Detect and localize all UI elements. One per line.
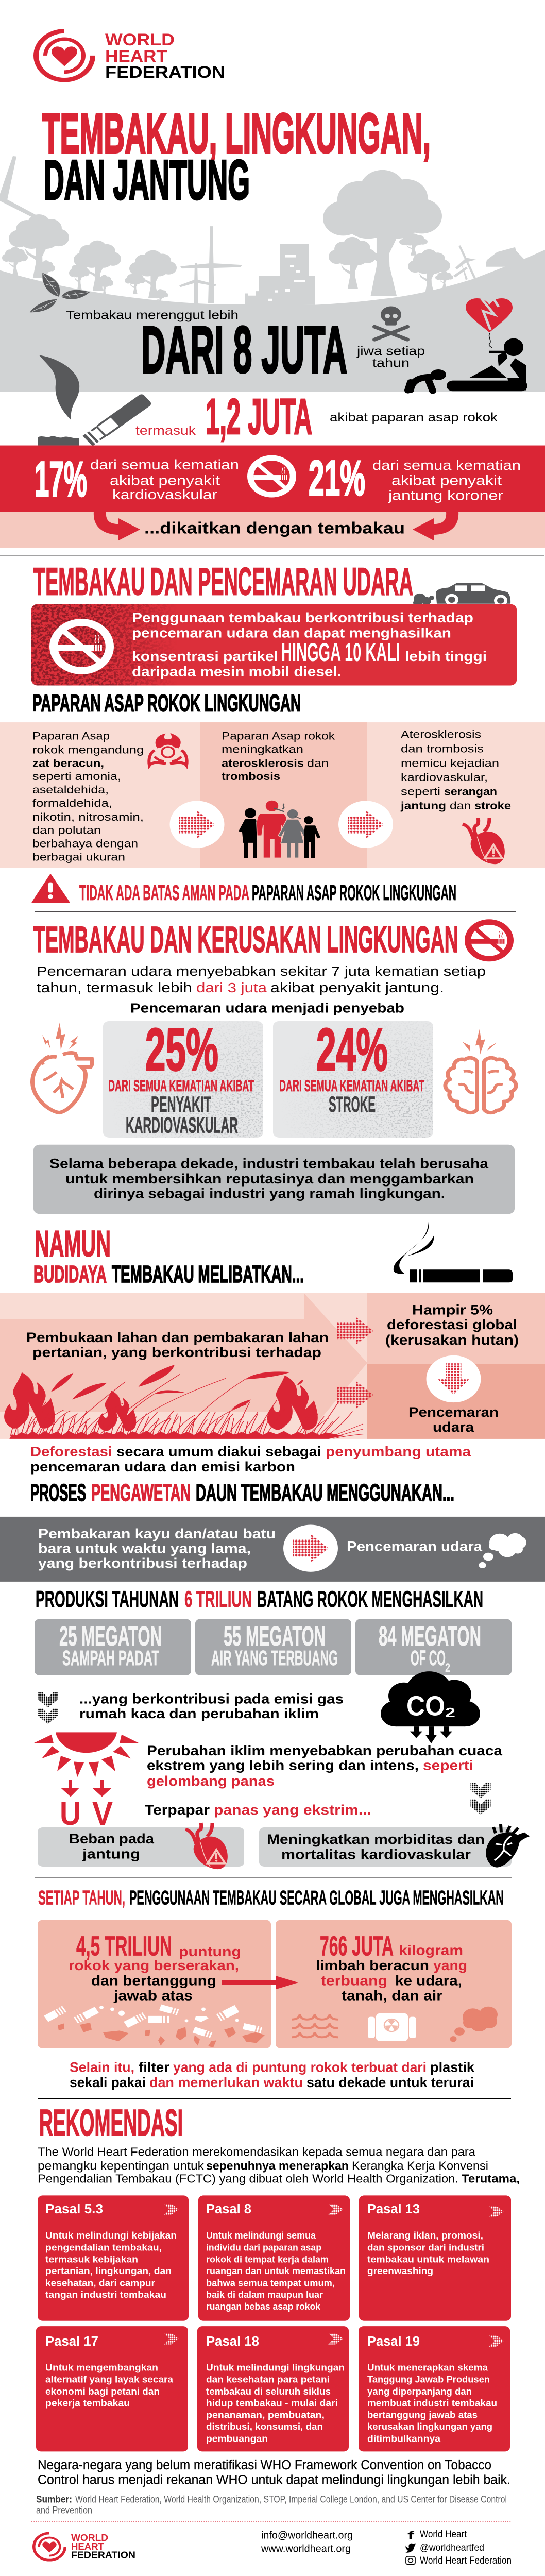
card: Pasal 8: bahwa semua tempat umum,	[206, 2278, 335, 2289]
icon: double dotted chevron right	[471, 1783, 490, 1815]
stat: 21%: jantung koroner	[388, 488, 503, 503]
social links	[405, 2529, 512, 2566]
callout text: Penggunaan tembakau berkontribusi terhadap	[132, 611, 473, 625]
subheading: pencemaran udara menjadi penyebab: Pencemaran udara menjadi penyebab	[130, 1001, 404, 1015]
stat: 17%	[35, 451, 239, 507]
card: Pasal 19: kerusakan lingkungan yang	[367, 2421, 492, 2432]
panel: 766 juta toxic waste: kilogram	[399, 1943, 463, 1958]
card: Pasal 8: ruangan dan untuk memastikan	[206, 2266, 346, 2277]
logo: footer	[34, 2533, 135, 2561]
warning: no safe level: TIDAK ADA BATAS AMAN PADA	[79, 881, 249, 905]
stat box: 25 megaton	[35, 1619, 191, 1675]
logo wordmark: HEART	[105, 46, 167, 65]
icon: right arrow circle	[338, 801, 393, 848]
text: hampir 5%: (kerusakan hutan)	[385, 1333, 519, 1348]
heading: proses pengawetan: PENGAWETAN	[91, 1479, 191, 1506]
callout: industry reputation	[33, 1145, 515, 1214]
box: morbiditas	[259, 1824, 530, 1868]
card: Pasal 8: ruangan bebas asap rokok	[206, 2301, 320, 2312]
callout: industry reputation: untuk membersihkan reputasinya dan menggambarkan	[65, 1172, 474, 1187]
text: terpapar panas	[145, 1803, 371, 1818]
card: Pasal 8	[198, 2195, 350, 2321]
icon: CO2 cloud: 2	[445, 1705, 455, 1720]
text: right column: dan trombosis	[401, 742, 484, 755]
text: left column: berbahaya dengan	[32, 837, 138, 850]
panel: 25 percent: KARDIOVASKULAR	[126, 1113, 238, 1138]
text: recommendation intro	[38, 2145, 520, 2185]
callout: industry reputation: dirinya sebagai industri yang ramah lingkungan.	[94, 1186, 445, 1201]
panel: 25 percent: DARI SEMUA KEMATIAN AKIBAT	[108, 1077, 254, 1095]
icon: heart rings	[36, 31, 93, 80]
heading: proses pengawetan: PROSES	[30, 1479, 86, 1506]
icon: sun with UV: U	[60, 1795, 81, 1832]
panel: 4,5 triliun cigarette butts: jawab atas	[113, 1989, 193, 2004]
landscape silhouette background	[0, 156, 545, 392]
icon: car exhaust	[413, 583, 510, 606]
footer wordmark: FEDERATION	[71, 2550, 135, 2561]
card: Pasal 18: dan kesehatan para petani	[206, 2375, 330, 2385]
card: Pasal 19: yang diperpanjang dan	[367, 2386, 472, 2397]
text: recommendation intro: Terutama,	[462, 2172, 520, 2185]
text: right column: dan	[450, 800, 471, 812]
text: deforestasi: pencemaran udara dan emisi karbon	[30, 1460, 295, 1475]
stat box: 25 megaton: SAMPAH PADAT	[62, 1647, 159, 1670]
text: air pollution deaths: Pencemaran udara menyebabkan sekitar 7 juta kematian setiap	[37, 964, 486, 978]
panel: 766 juta toxic waste: ke udara,	[395, 1973, 462, 1989]
icon: CO2 cloud	[381, 1671, 480, 1743]
icon: toxic barrel	[368, 2013, 416, 2041]
text: filter plastik: dan memerlukan waktu	[149, 2075, 303, 2090]
text: perubahan iklim: gelombang panas	[147, 1774, 275, 1789]
card: Pasal 13	[359, 2195, 511, 2321]
text: center column: aterosklerosis	[222, 757, 304, 769]
heading: produksi tahunan	[36, 1586, 483, 1612]
panel: 24 percent: 24%	[316, 1015, 388, 1083]
footer wordmark: HEART	[71, 2541, 104, 2552]
text: perubahan iklim: Perubahan iklim menyebabkan perubahan cuaca	[147, 1743, 503, 1759]
text: source: and Prevention	[36, 2505, 92, 2516]
card: Pasal 17: pekerja tembakau	[45, 2398, 130, 2409]
text: perubahan iklim	[147, 1743, 503, 1789]
social links: World Heart	[420, 2529, 467, 2540]
text: air pollution deaths: tahun, termasuk lebih	[37, 980, 192, 995]
card: Pasal 5.3: Pasal 5.3	[45, 2201, 103, 2216]
text: center column: dan	[307, 757, 329, 769]
card: Pasal 13: greenwashing	[367, 2266, 433, 2277]
text: center column: Paparan Asap rokok	[222, 730, 335, 742]
icon: broken heart	[466, 298, 513, 332]
card: Pasal 13: Melarang iklan, promosi,	[367, 2230, 483, 2241]
text: filter plastik: Selain itu,	[70, 2060, 134, 2075]
text: air pollution deaths: dari 3 juta	[196, 980, 267, 995]
text: NAMUN	[35, 1224, 111, 1264]
icon: tobacco leaves	[29, 273, 90, 313]
panel: 25 percent: 25%	[145, 1015, 218, 1083]
text: filter plastik: filter	[139, 2060, 169, 2075]
panel: 4,5 triliun cigarette butts: dan bertanggung	[91, 1973, 216, 1989]
icon: instagram	[406, 2556, 415, 2565]
stat: 17%: akibat penyakit	[110, 473, 220, 488]
text: deforestasi	[30, 1444, 471, 1475]
icon: heart rings small	[34, 2533, 65, 2560]
callout text	[132, 611, 487, 680]
panel: 25 percent: PENYAKIT	[151, 1092, 211, 1116]
panel: 766 juta toxic waste	[276, 1920, 512, 2048]
text: right column: stroke	[474, 800, 511, 812]
text: left column: seperti amonia,	[32, 770, 121, 783]
icon: facebook: f	[407, 2530, 415, 2543]
card: Pasal 19: membuat industri tembakau	[367, 2398, 497, 2409]
text: right column: serangan	[444, 785, 497, 798]
card: Pasal 18: tembakau di seluruh siklus	[206, 2386, 331, 2397]
text: emisi gas rumah kaca: rumah kaca dan perubahan iklim	[79, 1706, 319, 1721]
text: pembukaan lahan: pertanian, yang berkontribusi terhadap	[32, 1345, 321, 1361]
text: recommendation intro: Kerangka Kerja Konvensi	[352, 2159, 488, 2173]
text: filter plastik: plastik	[430, 2060, 475, 2075]
box: morbiditas: Meningkatkan morbiditas dan	[267, 1832, 485, 1847]
title: DAN JANTUNG	[44, 148, 250, 211]
text: emisi gas rumah kaca	[79, 1691, 344, 1721]
footer wordmark	[71, 2533, 135, 2561]
callout text: pencemaran udara dan dapat menghasilkan	[132, 625, 451, 641]
text: right column: memicu kejadian	[401, 757, 499, 769]
card: Pasal 18: distribusi, konsumsi, dan	[206, 2421, 323, 2432]
card: Pasal 5.3: Untuk melindungi kebijakan	[45, 2230, 177, 2241]
card: Pasal 8: baik di dalam maupun luar	[206, 2290, 323, 2300]
arrow shape background	[0, 1293, 367, 1439]
icon: arrow to air pollution	[337, 1381, 373, 1409]
stat: 21%: akibat penyakit	[391, 473, 502, 488]
icon: heart warning	[463, 818, 505, 864]
card: Pasal 17	[36, 2326, 188, 2451]
icon: white cloud	[479, 1533, 526, 1568]
heading: budidaya tembakau melibatkan: TEMBAKAU MELIBATKAN...	[112, 1261, 304, 1287]
band: curing burns wood or coal: yang berkontribusi terhadap	[38, 1556, 247, 1571]
icon: no smoking white	[250, 458, 293, 495]
stat: termasuk 1,2 juta akibat paparan asap rokok: termasuk	[135, 423, 196, 437]
text: terpapar panas: Terpapar	[145, 1803, 210, 1818]
text: contact: www.worldheart.org	[261, 2543, 351, 2554]
stat: termasuk 1,2 juta akibat paparan asap rokok: 1,2 JUTA	[206, 388, 312, 445]
stat: 21%: 21%	[309, 450, 365, 506]
stat box: 84 megaton: OF CO	[411, 1647, 446, 1670]
text: recommendation intro: sepenuhnya menerapkan	[206, 2159, 349, 2173]
illustration: butts and rocks	[44, 2005, 265, 2047]
arrow: right curved	[413, 512, 452, 540]
box: morbiditas: mortalitas kardiovaskular	[281, 1847, 471, 1862]
text: filter plastik	[70, 2060, 475, 2090]
card: Pasal 18: penanaman, pembuatan,	[206, 2410, 325, 2420]
icon: sun with UV	[33, 1732, 140, 1832]
card: Pasal 18: Untuk melindungi lingkungan	[206, 2363, 345, 2373]
text: left column: nikotin, nitrosamin,	[32, 810, 144, 823]
text: left column: asetaldehida,	[32, 784, 109, 796]
title	[42, 101, 431, 211]
icon: arrow to deforestation	[337, 1317, 373, 1345]
panel: 4,5 triliun cigarette butts: rokok yang berserakan,	[69, 1958, 239, 1973]
text: hampir 5%: deforestasi global	[387, 1317, 517, 1332]
panel: 766 juta toxic waste: limbah beracun	[316, 1958, 429, 1973]
card: Pasal 13: dan sponsor dari industri	[367, 2243, 484, 2253]
card: Pasal 19: Pasal 19	[367, 2334, 420, 2349]
heading: setiap tahun: SETIAP TAHUN,	[38, 1886, 125, 1909]
text: contact: info@worldheart.org	[261, 2529, 353, 2541]
icon: brain with lightning	[445, 1029, 516, 1113]
stat box: 84 megaton: 2	[445, 1660, 450, 1675]
text: emisi gas rumah kaca: ...yang berkontribusi pada emisi gas	[79, 1691, 344, 1707]
callout text: HINGGA 10 KALI	[281, 638, 400, 667]
heading: budidaya tembakau melibatkan	[33, 1261, 304, 1287]
heading: proses pengawetan	[30, 1479, 454, 1506]
stat: 21%: dari semua kematian	[372, 458, 521, 473]
panel: 4,5 triliun cigarette butts: puntung	[179, 1944, 241, 1960]
stat box: 25 megaton: 25 MEGATON	[59, 1621, 162, 1652]
icon: double dotted chevron	[38, 1692, 58, 1724]
text: jiwa setiap tahun	[356, 344, 425, 370]
stat: 21%	[309, 450, 521, 506]
card: Pasal 5.3: termasuk kebijakan	[45, 2255, 138, 2265]
callout text: konsentrasi partikel	[132, 649, 278, 664]
band: curing burns wood or coal: bara untuk waktu yang lama,	[38, 1541, 251, 1556]
panel: secondhand smoke pathway	[0, 722, 545, 868]
icon: salmon cloud	[450, 2007, 498, 2042]
band: curing burns wood or coal: Pembakaran kayu dan/atau batu	[38, 1527, 276, 1542]
text: terpapar panas: panas yang ekstrim...	[214, 1803, 371, 1818]
card: Pasal 18: pembuangan	[206, 2434, 268, 2444]
card: Pasal 5.3: pertanian, lingkungan, dan	[45, 2266, 172, 2277]
text: hampir 5%: Hampir 5%	[412, 1302, 493, 1318]
text: contact	[261, 2529, 353, 2554]
text: left column: zat beracun,	[32, 757, 104, 769]
card: Pasal 19: bertanggung jawab atas	[367, 2410, 478, 2420]
card: Pasal 19: Tanggung Jawab Produsen	[367, 2375, 490, 2385]
box: beban pada jantung: Beban pada	[69, 1832, 155, 1847]
card: Pasal 17: alternatif yang layak secara	[45, 2375, 174, 2385]
text: left column: rokok mengandung	[32, 743, 144, 756]
text: dikaitkan: ...dikaitkan dengan tembakau	[144, 520, 405, 537]
callout text: lebih tinggi	[405, 649, 487, 664]
icon: left arrow circle	[170, 801, 225, 848]
text: WHO FCTC ratification	[38, 2458, 510, 2487]
icon: people smoking	[237, 800, 320, 858]
panel: land clearing and burning	[0, 1293, 545, 1439]
text: deforestasi: penyumbang utama	[326, 1444, 471, 1460]
icon: biohazard	[149, 736, 187, 766]
text: perubahan iklim: seperti	[423, 1758, 473, 1773]
text: filter plastik: sekali pakai	[70, 2075, 146, 2090]
text: pembukaan lahan: Pembukaan lahan dan pembakaran lahan	[26, 1330, 329, 1345]
panel: 766 juta toxic waste: terbuang	[321, 1973, 387, 1989]
logo: World Heart Federation header	[36, 30, 225, 81]
text: right column: kardiovaskular,	[401, 771, 488, 784]
text: jiwa setiap tahun: tahun	[372, 356, 410, 370]
text: center column: meningkatkan	[222, 743, 303, 755]
text: left column: Paparan Asap	[32, 730, 110, 742]
arrow: left curved	[100, 512, 140, 540]
icon: cigarette with smoke in ashtray	[38, 355, 152, 447]
box: beban pada jantung: jantung	[82, 1846, 140, 1862]
text: right column	[400, 728, 511, 812]
panel: 4,5 triliun cigarette butts: 4,5 TRILIUN	[76, 1931, 172, 1962]
icon: black heart	[486, 1824, 530, 1868]
card: Pasal 5.3: pengendalian tembakau,	[45, 2243, 162, 2253]
callout: tobacco air pollution	[31, 604, 517, 685]
icon: no smoking red	[468, 922, 510, 959]
card: Pasal 19	[359, 2326, 510, 2451]
stat box: 55 megaton: AIR YANG TERBUANG	[211, 1647, 338, 1670]
arrow: red between panels	[222, 1976, 298, 1989]
text: left column: dan polutan	[32, 824, 101, 836]
panel: 24 percent	[273, 1015, 433, 1138]
text: deforestasi: Deforestasi	[30, 1444, 112, 1460]
text: pencemaran udara: udara	[433, 1420, 474, 1435]
logo wordmark: FEDERATION	[105, 62, 225, 81]
heading: budidaya tembakau melibatkan: BUDIDAYA	[33, 1261, 107, 1287]
band: red statistics	[0, 446, 545, 512]
card: Pasal 17: Pasal 17	[45, 2334, 98, 2349]
panel: 24 percent: STROKE	[329, 1092, 376, 1116]
card: Pasal 8: Pasal 8	[206, 2201, 251, 2216]
text: recommendation intro: Pengendalian Tembakau (FCTC) yang dibuat oleh World Health Organization.	[38, 2172, 458, 2185]
callout text: daripada mesin mobil diesel.	[132, 664, 342, 680]
icon: CO2 cloud: CO	[406, 1691, 445, 1722]
text: air pollution deaths: akibat penyakit jantung.	[270, 980, 444, 995]
text: right column: Aterosklerosis	[401, 728, 481, 740]
heading: paparan asap rokok lingkungan: PAPARAN ASAP ROKOK LINGKUNGAN	[32, 689, 301, 717]
card: Pasal 18: Pasal 18	[206, 2334, 259, 2349]
text: pembukaan lahan	[26, 1330, 329, 1361]
logo wordmark: WORLD	[105, 30, 175, 49]
stat box: 84 megaton	[355, 1619, 512, 1675]
text: filter plastik: satu dekade untuk terurai	[306, 2075, 474, 2090]
icon: down arrow circle	[427, 1355, 481, 1402]
icon: arrow circle	[283, 1524, 338, 1572]
card: Pasal 8: rokok di tempat kerja dalam	[206, 2255, 329, 2265]
stat: 17%: kardiovaskular	[112, 487, 217, 502]
text: filter plastik: yang ada di puntung rokok terbuat dari	[173, 2060, 427, 2075]
panel: 25 percent	[103, 1015, 263, 1138]
text: REKOMENDASI	[39, 2102, 183, 2144]
card: Pasal 13: tembakau untuk melawan	[367, 2255, 489, 2265]
icon: twitter	[405, 2544, 416, 2553]
footer wordmark: WORLD	[71, 2533, 108, 2543]
icon: heart warning	[185, 1823, 228, 1869]
text: hampir 5%	[385, 1302, 519, 1348]
text: recommendation intro: The World Heart Federation merekomendasikan kepada semua negara dan para	[38, 2145, 476, 2159]
band: curing burns wood or coal: Pencemaran udara	[347, 1539, 483, 1554]
card: Pasal 19: Untuk menerapkan skema	[367, 2363, 488, 2373]
text: perubahan iklim: ekstrem yang lebih sering dan intens,	[147, 1758, 419, 1773]
text: right column: seperti	[401, 785, 440, 798]
icon: skull and crossbones	[374, 306, 407, 340]
card: Pasal 8: Untuk melindungi semua	[206, 2230, 316, 2241]
social links: @worldheartfed	[420, 2542, 484, 2553]
text: jiwa setiap tahun: jiwa setiap	[356, 344, 425, 358]
card: Pasal 5.3: kesehatan, dari campur	[45, 2278, 155, 2289]
text: right column: jantung	[400, 800, 446, 812]
text: left column: berbagai ukuran	[32, 851, 125, 863]
panel: 766 juta toxic waste: 766 JUTA	[320, 1931, 394, 1962]
icon: water waves	[292, 2014, 338, 2037]
icon: warning triangle	[32, 875, 69, 903]
text: deforestasi: secara umum diakui sebagai	[116, 1444, 321, 1460]
card: Pasal 5.3: tangan industri tembakau	[45, 2290, 166, 2300]
card: Pasal 18	[197, 2326, 349, 2451]
callout: industry reputation: Selama beberapa dekade, industri tembakau telah berusaha	[49, 1156, 489, 1172]
card: Pasal 17: Untuk mengembangkan	[45, 2363, 158, 2373]
social links: World Heart Federation	[420, 2555, 512, 2566]
panel: 4,5 triliun cigarette butts	[38, 1920, 271, 2048]
band: dikaitkan dengan tembakau	[0, 512, 545, 548]
text: air pollution deaths	[37, 964, 486, 995]
logo wordmark	[105, 30, 225, 81]
icon: sun with UV: V	[92, 1795, 113, 1832]
icon: smoker with child	[408, 333, 527, 391]
icon: heart with lightning	[32, 1022, 92, 1113]
card: Pasal 8: individu dari paparan asap	[206, 2243, 321, 2253]
text: left column: formaldehida,	[32, 797, 112, 809]
text: source: Sumber:	[36, 2494, 72, 2505]
panel: 766 juta toxic waste: yang	[433, 1958, 467, 1973]
text: pencemaran udara	[408, 1405, 499, 1435]
stat box: 55 megaton: 55 MEGATON	[224, 1621, 326, 1652]
illustration: burning grass	[4, 1365, 364, 1439]
text: recommendation intro: pemangku kepentingan untuk	[38, 2159, 204, 2173]
text: center column: trombosis	[222, 770, 280, 783]
icon: cigarette black	[394, 1222, 513, 1282]
stat: termasuk 1,2 juta akibat paparan asap rokok	[135, 388, 498, 445]
card: Pasal 5.3	[38, 2195, 189, 2321]
stat: 17%: 17%	[35, 451, 87, 507]
stat box: 55 megaton	[195, 1619, 351, 1675]
panel: 766 juta toxic waste: tanah, dan air	[342, 1989, 442, 2004]
text: left column	[32, 730, 144, 863]
band: curing burns wood or coal	[0, 1517, 545, 1582]
text: center column	[222, 730, 335, 783]
stat: 17%: dari semua kematian	[90, 457, 239, 473]
icon: no smoking	[54, 622, 110, 671]
heading: produksi tahunan: 6 TRILIUN	[184, 1586, 252, 1612]
box: beban pada jantung	[38, 1823, 244, 1869]
card: Pasal 17: ekonomi bagi petani dan	[45, 2386, 160, 2397]
text: source	[36, 2494, 507, 2516]
stat: termasuk 1,2 juta akibat paparan asap rokok: akibat paparan asap rokok	[330, 410, 498, 424]
heading: produksi tahunan: PRODUKSI TAHUNAN	[36, 1586, 179, 1612]
card: Pasal 13: Pasal 13	[367, 2201, 420, 2216]
text: Tembakau merenggut lebih: Tembakau merenggut lebih	[66, 308, 239, 322]
text: pencemaran udara: Pencemaran	[408, 1405, 499, 1420]
card: Pasal 19: ditimbulkannya	[367, 2434, 441, 2444]
card: Pasal 18: hidup tembakau - mulai dari	[206, 2398, 338, 2409]
